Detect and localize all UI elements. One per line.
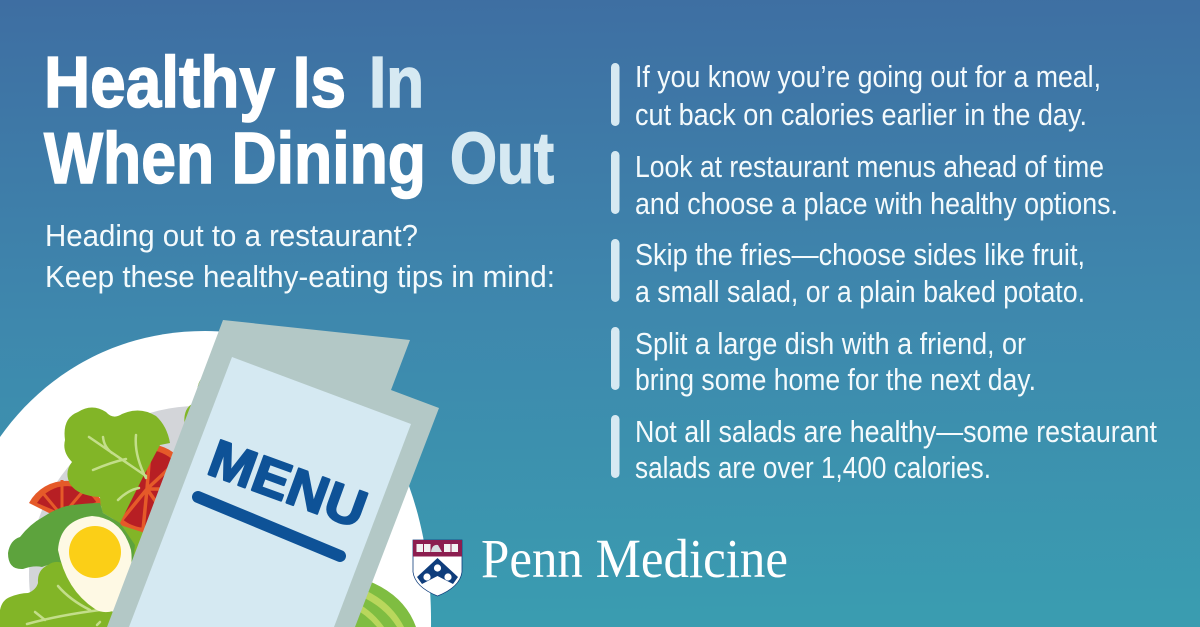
illustration: salad plate and menu: [0, 320, 439, 627]
shield: [413, 540, 462, 596]
subtitle: Heading out to a restaurant?: [45, 218, 418, 253]
subtitle: [45, 218, 555, 294]
title: In: [369, 43, 424, 123]
title: Healthy Is: [44, 43, 346, 123]
tip 2: [611, 149, 1118, 221]
menu page: [129, 357, 411, 627]
subtitle: Keep these healthy-eating tips in mind:: [45, 259, 555, 294]
tip 5: salads are over 1,400 calories.: [635, 450, 991, 485]
tip 5: [611, 414, 1157, 485]
inner plate shade: [29, 406, 367, 627]
title: [44, 43, 554, 199]
lettuce leaf top: [64, 408, 170, 523]
tip 4: bring some home for the next day.: [635, 362, 1036, 397]
tip 3: [611, 237, 1085, 309]
tomato slice left: [29, 480, 104, 516]
menu label: MENU: [201, 429, 374, 540]
tomato slice right: [102, 444, 192, 534]
menu underline: [198, 497, 340, 556]
tip 3: Skip the fries—choose sides like fruit,: [635, 237, 1085, 272]
tip 1: [611, 59, 1101, 132]
wordmark: Penn Medicine: [481, 528, 788, 589]
small leaves behind menu: [184, 376, 210, 428]
cucumber slices: [330, 575, 416, 627]
green leaf beside egg: [118, 525, 145, 570]
tip 1: cut back on calories earlier in the day.: [635, 97, 1087, 132]
title: When Dining: [44, 119, 426, 199]
tips list: [611, 59, 1157, 485]
tip 1: If you know you’re going out for a meal,: [635, 59, 1101, 94]
dark green leaf: [8, 503, 135, 585]
menu cover: [107, 320, 439, 627]
Penn Medicine logo: [413, 528, 788, 596]
plate: [0, 331, 431, 627]
tip 2: and choose a place with healthy options.: [635, 186, 1118, 221]
tip 2: Look at restaurant menus ahead of time: [635, 149, 1104, 184]
tip 3: a small salad, or a plain baked potato.: [635, 274, 1085, 309]
egg: [58, 516, 132, 612]
tip 4: Split a large dish with a friend, or: [635, 326, 1026, 361]
lettuce leaf bottom: [0, 562, 113, 627]
tip 4: [611, 326, 1036, 397]
title: Out: [450, 119, 554, 199]
menu: [107, 320, 439, 627]
